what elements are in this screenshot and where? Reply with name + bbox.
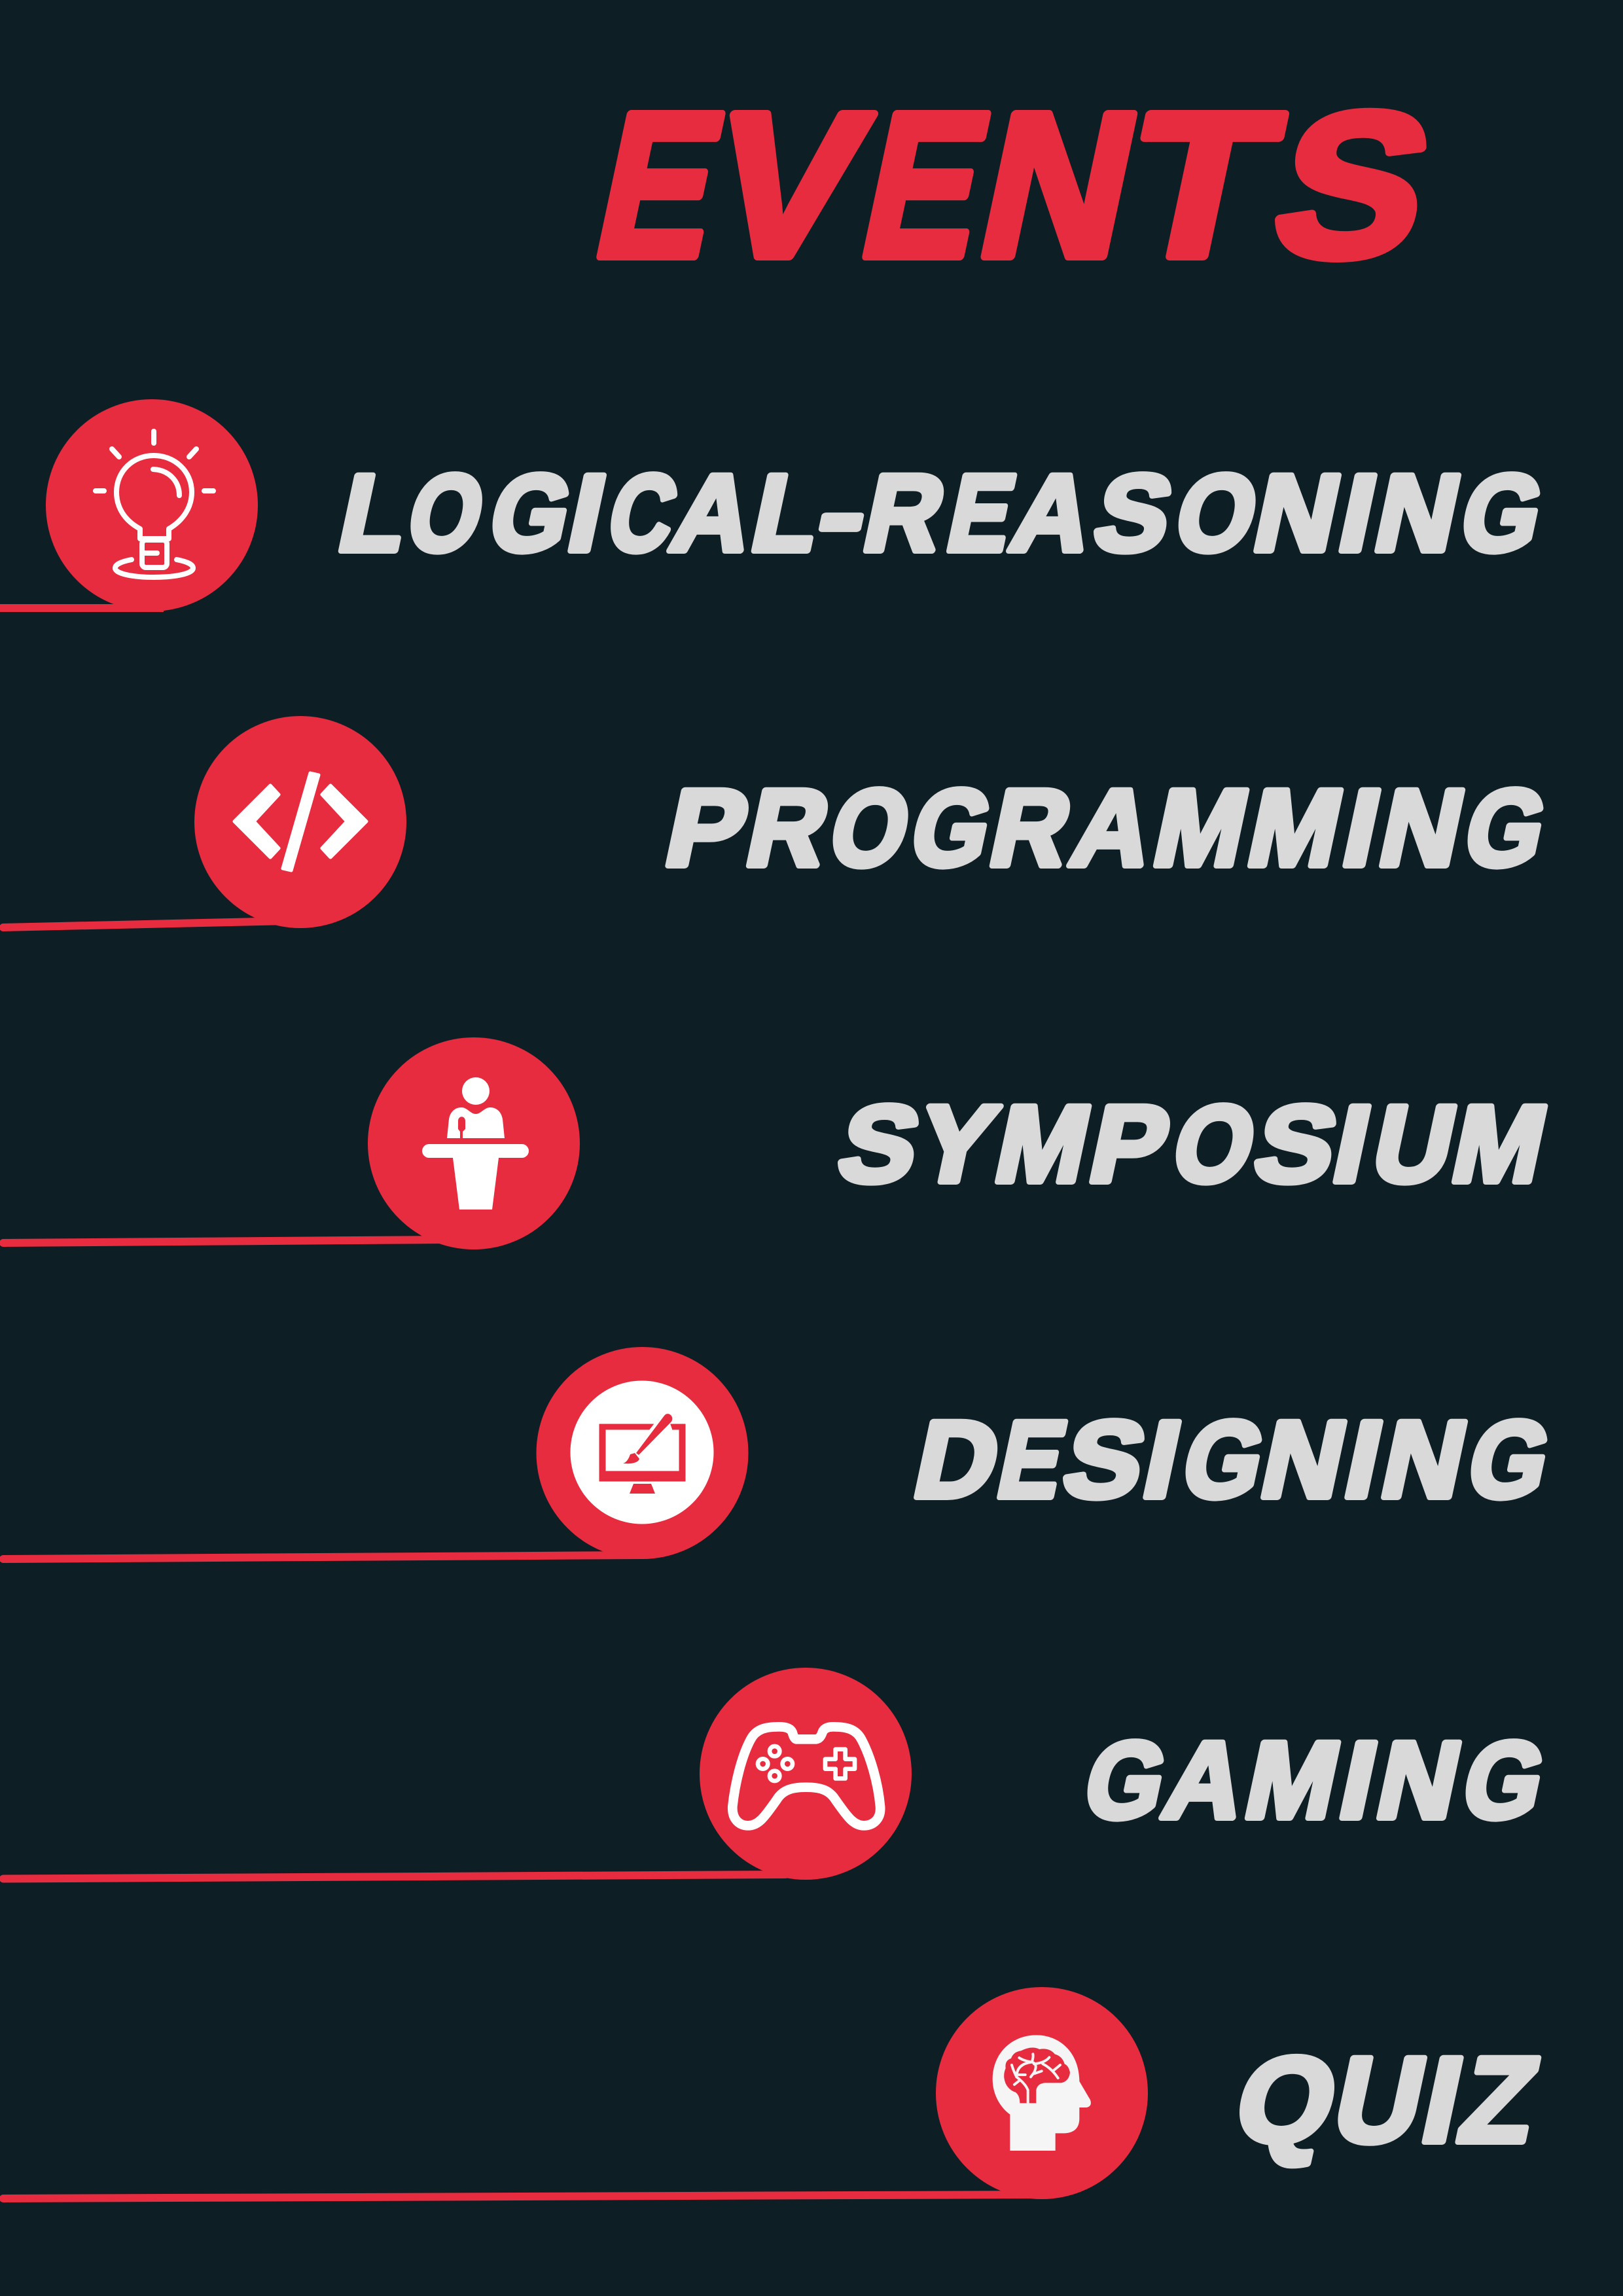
label: GAMING: M: [1236, 1719, 1350, 1841]
label: SYMPOSIUM: U: [1363, 1083, 1466, 1205]
label: SYMPOSIUM: M: [1442, 1083, 1557, 1205]
connector line 6: [3, 2195, 1034, 2198]
red circle 6: [936, 1987, 1148, 2199]
connector line 3: [3, 1240, 445, 1243]
label: SYMPOSIUM: S: [1245, 1083, 1348, 1205]
label: DESIGNING: S: [1054, 1399, 1156, 1520]
label: SYMPOSIUM: S: [829, 1083, 931, 1205]
label: LOGICAL-REASONING: E: [938, 452, 1025, 574]
label: QUIZ: Q: [1225, 2032, 1349, 2168]
label: QUIZ: I: [1412, 2032, 1474, 2168]
label: QUIZ: Z: [1450, 2032, 1550, 2168]
label: LOGICAL-REASONING: N: [1365, 452, 1471, 574]
icon: light bulb: [96, 431, 213, 577]
label: SYMPOSIUM: M: [986, 1083, 1101, 1205]
connector line 5: [3, 1874, 785, 1878]
label: LOGICAL-REASONING: I: [1329, 452, 1387, 574]
label: SYMPOSIUM: P: [1080, 1083, 1180, 1205]
panel: designing row: [3, 1347, 1561, 1559]
label: PROGRAMMING: A: [1061, 767, 1164, 889]
connector line 1: [0, 604, 164, 612]
label: DESIGNING: I: [1335, 1399, 1393, 1520]
red circle 2: [194, 716, 406, 928]
title: EVENTS: S: [1257, 71, 1450, 300]
label: LOGICAL-REASONING: N: [1244, 452, 1351, 574]
icon: speaker at podium: [422, 1077, 529, 1210]
icon: monitor with paintbrush: [571, 1381, 713, 1524]
label: LOGICAL-REASONING: O: [398, 452, 495, 574]
red circle 5: [700, 1668, 912, 1880]
label: DESIGNING: E: [988, 1399, 1076, 1520]
title: EVENTS: E: [580, 71, 741, 300]
label: PROGRAMMING: P: [656, 767, 758, 889]
icon: code brackets: [234, 773, 366, 870]
label: PROGRAMMING: R: [737, 767, 840, 889]
label: LOGICAL-REASONING: L: [329, 452, 419, 574]
label: DESIGNING: I: [1133, 1399, 1191, 1520]
icon: game controller: [732, 1727, 880, 1825]
title: EVENTS: T: [1109, 71, 1296, 300]
panel: symposium row: [3, 1037, 1557, 1249]
red circle 3: [368, 1037, 580, 1249]
label: PROGRAMMING: I: [1333, 767, 1391, 889]
label: LOGICAL-REASONING: A: [662, 452, 764, 574]
label: DESIGNING: N: [1372, 1399, 1477, 1520]
label: PROGRAMMING: O: [820, 767, 921, 889]
connector line 4: [3, 1555, 641, 1559]
red circle 4: [537, 1347, 749, 1559]
label: GAMING: G: [1453, 1719, 1556, 1841]
label: LOGICAL-REASONING: O: [1166, 452, 1268, 574]
label: DESIGNING: N: [1251, 1399, 1357, 1520]
label: PROGRAMMING: R: [980, 767, 1082, 889]
label: LOGICAL-REASONING: S: [1084, 452, 1183, 574]
panel: gaming row: [3, 1668, 1556, 1880]
label: PROGRAMMING: M: [1238, 767, 1353, 889]
label: DESIGNING: D: [904, 1399, 1010, 1520]
label: QUIZ: U: [1323, 2032, 1437, 2168]
label: PROGRAMMING: G: [901, 767, 1003, 889]
panel: quiz row: [3, 1987, 1550, 2199]
label: LOGICAL-REASONING: R: [854, 452, 955, 574]
label: LOGICAL-REASONING: G: [1451, 452, 1554, 574]
title: EVENTS: E: [846, 71, 1007, 300]
red circle 1: [46, 399, 258, 611]
label: LOGICAL-REASONING: L: [742, 452, 832, 574]
icon: head with brain: [993, 2035, 1091, 2151]
label: GAMING: N: [1367, 1719, 1471, 1841]
label: GAMING: A: [1154, 1719, 1257, 1841]
label: DESIGNING: G: [1458, 1399, 1561, 1520]
label: LOGICAL-REASONING: I: [558, 452, 616, 574]
title: EVENTS: V: [694, 71, 885, 300]
label: LOGICAL-REASONING: -: [808, 452, 879, 574]
label: DESIGNING: G: [1173, 1399, 1275, 1520]
label: SYMPOSIUM: I: [1323, 1083, 1381, 1205]
label: LOGICAL-REASONING: A: [1001, 452, 1104, 574]
connector line 2: [3, 921, 288, 927]
label: GAMING: I: [1330, 1719, 1387, 1841]
title: EVENTS: N: [963, 71, 1156, 300]
panel: programming row: [3, 716, 1557, 928]
label: GAMING: G: [1075, 1719, 1177, 1841]
label: SYMPOSIUM: Y: [906, 1083, 1007, 1205]
label: SYMPOSIUM: O: [1163, 1083, 1266, 1205]
panel: logical-reasoning row: [0, 399, 1554, 611]
label: PROGRAMMING: G: [1455, 767, 1557, 889]
label: PROGRAMMING: M: [1144, 767, 1258, 889]
label: PROGRAMMING: N: [1370, 767, 1474, 889]
label: LOGICAL-REASONING: G: [480, 452, 582, 574]
label: LOGICAL-REASONING: C: [598, 452, 687, 574]
